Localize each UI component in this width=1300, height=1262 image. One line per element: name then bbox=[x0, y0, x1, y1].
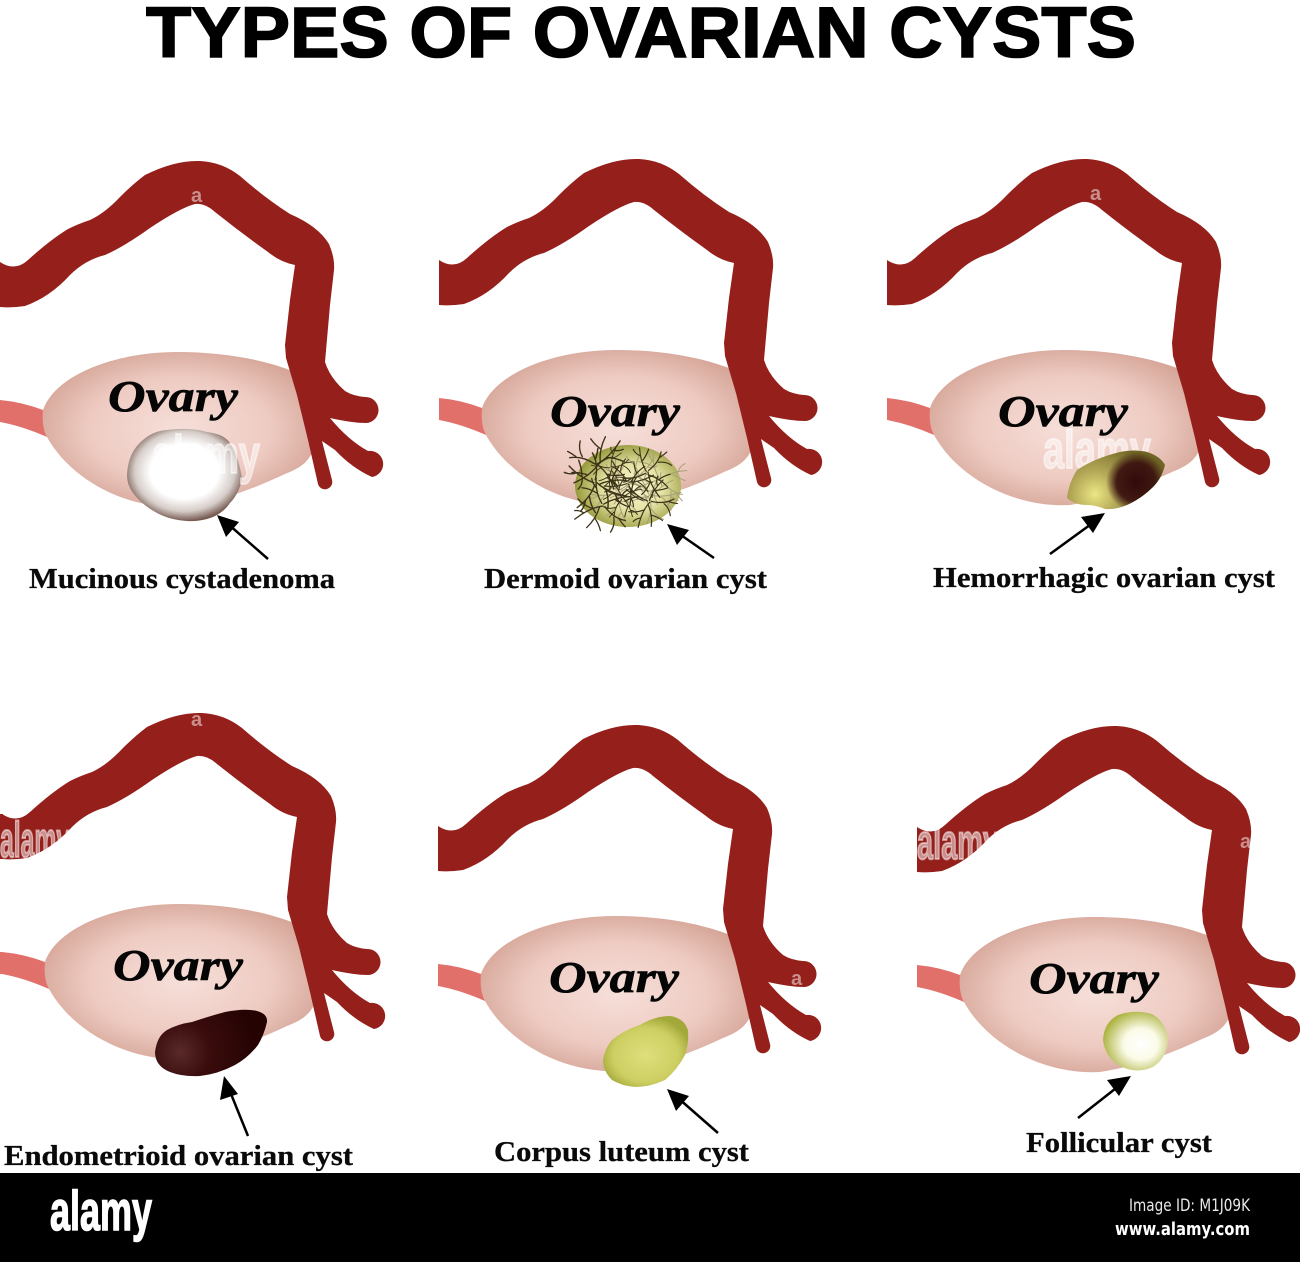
watermark letters on tubes bbox=[191, 183, 1252, 990]
cyst name: Follicular cyst bbox=[1026, 1127, 1212, 1159]
panel: dermoid ovarian cyst bbox=[439, 159, 822, 595]
watermark letters on tubes: a bbox=[1240, 831, 1252, 853]
watermark: alamy bbox=[152, 425, 260, 485]
ovary label: Ovary bbox=[1029, 954, 1160, 1003]
arrow bbox=[667, 1089, 718, 1133]
footer bar bbox=[0, 1173, 1300, 1262]
website: www.alamy.com bbox=[1115, 1219, 1250, 1240]
cyst name: Dermoid ovarian cyst bbox=[484, 563, 767, 595]
watermark: alamy bbox=[917, 814, 999, 870]
cyst: dermoid with hair bbox=[561, 437, 695, 540]
cyst: endometrioid bbox=[155, 1010, 267, 1076]
watermark letters on tubes: a bbox=[191, 709, 203, 731]
panel: hemorrhagic ovarian cyst bbox=[887, 159, 1275, 594]
ovary and tube illustration bbox=[0, 161, 383, 507]
cyst: white mucinous bbox=[127, 429, 242, 521]
left edge patch: ligament bbox=[0, 952, 3, 974]
watermark letters on tubes: a bbox=[191, 185, 203, 207]
ovary label: Ovary bbox=[998, 387, 1129, 436]
arrow bbox=[1078, 1076, 1131, 1118]
ovary and tube illustration bbox=[887, 159, 1270, 505]
image id: Image ID: M1J09K bbox=[1129, 1196, 1251, 1216]
arrow bbox=[1050, 513, 1105, 554]
cyst: corpus luteum bbox=[603, 1016, 688, 1087]
cyst name: Corpus luteum cyst bbox=[494, 1136, 749, 1168]
cyst name: Mucinous cystadenoma bbox=[29, 563, 336, 595]
ovary and tube illustration bbox=[439, 159, 822, 505]
ovary label: Ovary bbox=[113, 941, 244, 990]
ovary and tube illustration bbox=[438, 725, 821, 1071]
cyst name: Endometrioid ovarian cyst bbox=[4, 1140, 353, 1172]
arrow bbox=[667, 524, 714, 558]
panel: follicular cyst bbox=[917, 726, 1300, 1159]
watermark letters on tubes: a bbox=[791, 968, 803, 990]
cyst: follicular bbox=[1103, 1012, 1168, 1070]
ovary label: Ovary bbox=[550, 387, 681, 436]
ovary label: Ovary bbox=[108, 372, 239, 421]
cyst: hemorrhagic bbox=[1067, 450, 1165, 509]
ovary and tube illustration bbox=[2, 713, 385, 1059]
cyst name: Hemorrhagic ovarian cyst bbox=[933, 562, 1275, 594]
arrow bbox=[220, 1076, 248, 1136]
watermark: alamy bbox=[1043, 420, 1151, 480]
arrow bbox=[217, 515, 268, 559]
left edge patch: tube bbox=[0, 814, 3, 859]
panel: corpus luteum cyst bbox=[438, 725, 821, 1168]
ovary and tube illustration bbox=[917, 726, 1300, 1072]
panel: endometrioid ovarian cyst: alamy bbox=[0, 812, 70, 868]
panel: mucinous cystadenoma bbox=[0, 161, 383, 595]
footer logo: alamy bbox=[50, 1179, 152, 1242]
panel: endometrioid ovarian cyst bbox=[0, 713, 385, 1172]
ovary label: Ovary bbox=[549, 953, 680, 1002]
watermark letters on tubes: a bbox=[1090, 183, 1102, 205]
